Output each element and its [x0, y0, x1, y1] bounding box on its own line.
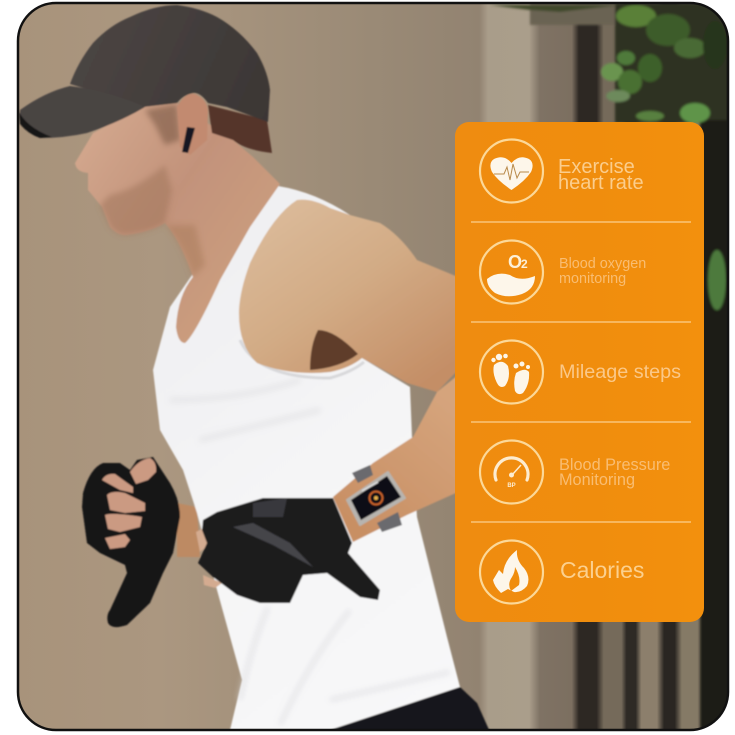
label: heart rate line: heart rate	[558, 172, 644, 194]
label: calories: Calories	[560, 557, 644, 583]
right gloved hand	[198, 498, 380, 603]
forearm	[333, 375, 458, 542]
foliage	[490, 3, 728, 730]
head and neck	[75, 103, 280, 343]
cap	[70, 5, 270, 122]
left gloved hand	[82, 457, 180, 627]
label: mileage steps: Mileage steps	[559, 361, 681, 383]
shirt folds	[236, 412, 448, 722]
icon: heart rate	[480, 140, 543, 202]
panel: health features	[455, 122, 704, 622]
icon: blood pressure gauge	[480, 440, 543, 504]
ear	[177, 94, 208, 155]
icon: footprints	[480, 340, 543, 404]
shirt	[153, 186, 460, 730]
icon: calories flame	[480, 540, 543, 604]
right fingertips	[196, 528, 222, 588]
runner figure	[19, 5, 490, 732]
icon: blood oxygen	[480, 240, 543, 304]
fingers	[102, 474, 133, 493]
icon: earbud	[182, 127, 195, 153]
label: monitoring line two: Monitoring	[559, 471, 635, 489]
stubble	[100, 165, 172, 235]
armhole shadow on shirt	[240, 340, 364, 378]
label: blood oxygen monitoring: Blood oxygen	[559, 256, 646, 272]
label: exercise heart rate: Exercise	[558, 156, 635, 178]
sideburn	[145, 104, 180, 145]
armpit shadow	[310, 330, 358, 370]
label: monitoring line: monitoring	[559, 271, 626, 287]
icon: smartwatch	[347, 465, 405, 532]
neck shadow	[165, 225, 205, 277]
icon: blood pressure gauge: BP	[507, 483, 516, 489]
shorts	[330, 687, 490, 732]
cap brim	[20, 86, 145, 138]
label: blood pressure monitoring: Blood Pressure	[559, 456, 670, 474]
hair	[208, 105, 272, 153]
icon: blood oxygen: O	[508, 252, 522, 272]
shoulder and upper arm	[239, 200, 458, 392]
rear arm	[177, 503, 200, 557]
icon: blood oxygen: 2	[521, 257, 528, 271]
